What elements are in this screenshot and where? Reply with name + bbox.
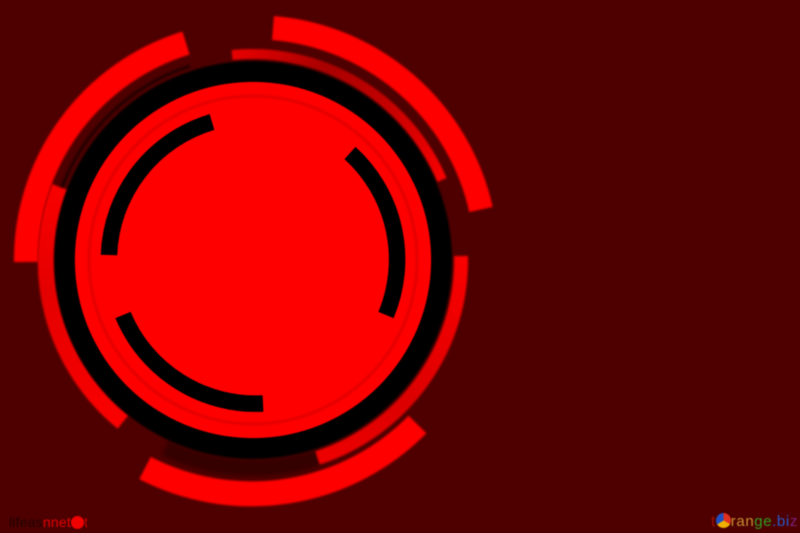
dim arc: left xyxy=(46,187,123,422)
inner black arc: upper right xyxy=(350,153,397,315)
watermark: left: lifeasnnet t xyxy=(9,514,88,530)
bright arc: top right xyxy=(273,28,481,210)
dark fade on ring upper left xyxy=(62,66,190,187)
shadow arc below black ring xyxy=(165,448,320,468)
bright arc: top left xyxy=(26,43,186,262)
watermark: right: t range.biz xyxy=(711,513,798,530)
dim arc: top right xyxy=(232,54,442,180)
inner black arc: upper left xyxy=(109,122,212,255)
bright arc: bottom xyxy=(145,424,418,494)
thin inner ring xyxy=(89,96,417,424)
black ring xyxy=(64,72,442,448)
inner black arc: lower left xyxy=(123,315,263,404)
icon: colored ball xyxy=(716,513,731,528)
red central disc xyxy=(75,82,431,438)
icon: red ball xyxy=(71,516,84,529)
dim arc: bottom right xyxy=(318,256,461,458)
